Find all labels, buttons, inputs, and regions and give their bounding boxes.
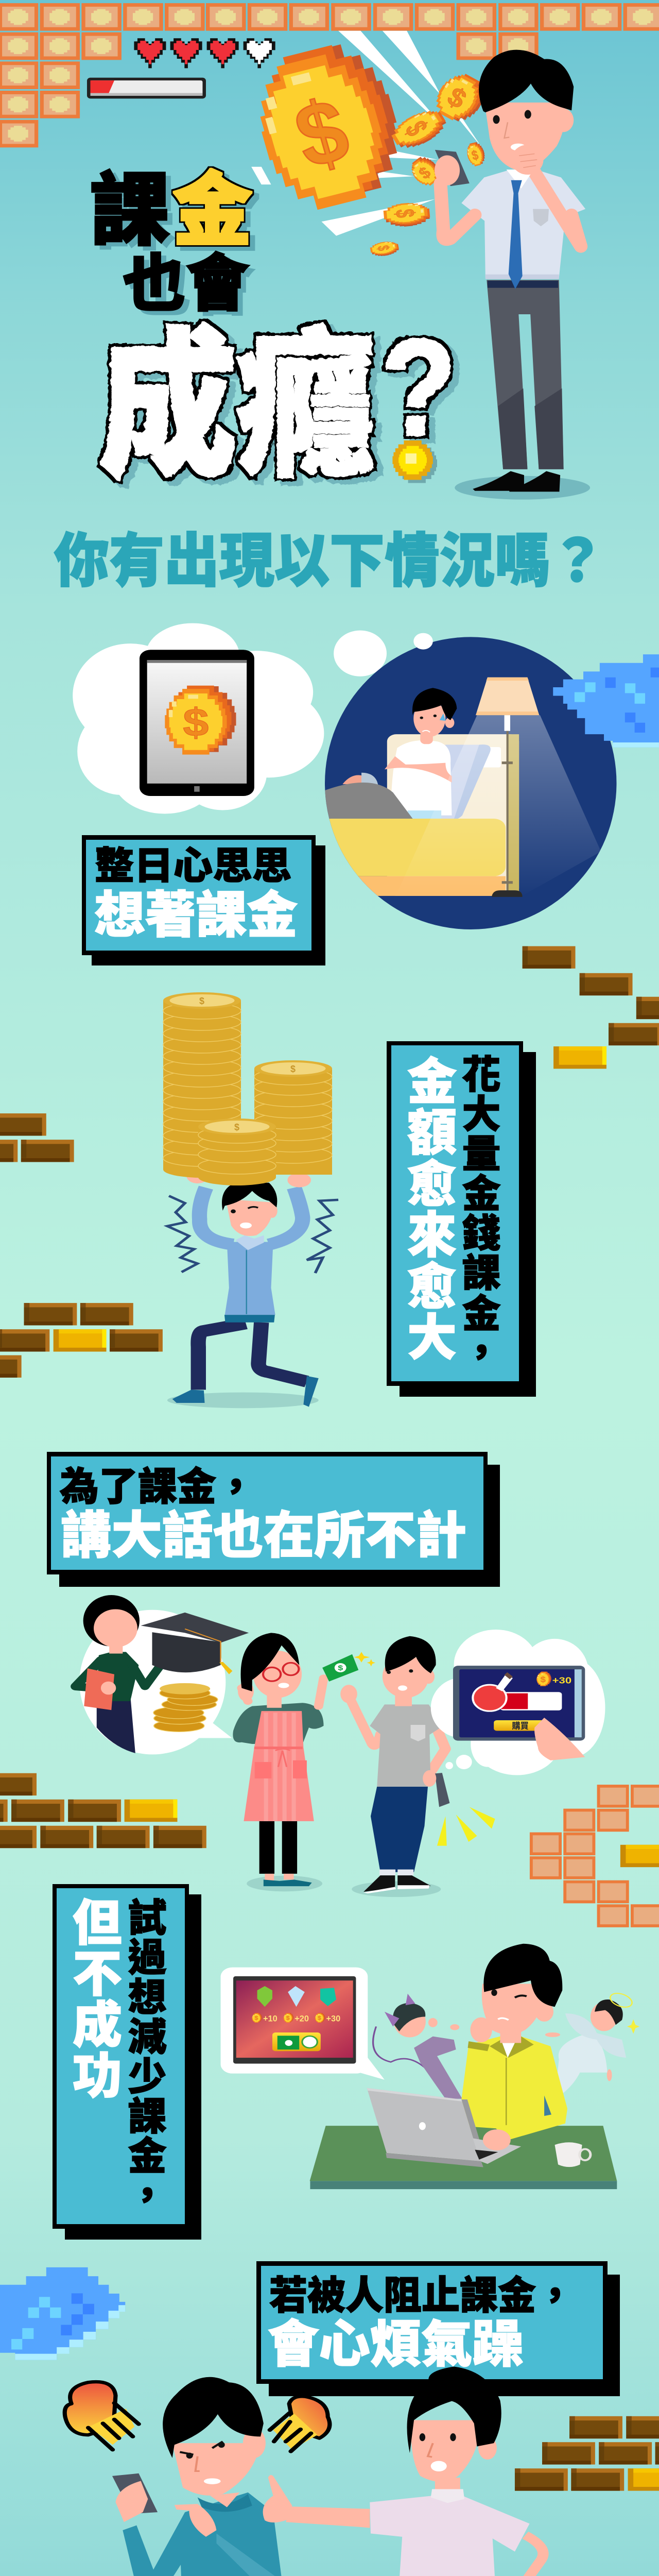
speech bubble: teacher and coins: [76, 1595, 249, 1754]
woman with apron: [233, 1633, 375, 1891]
small flying coins: [369, 67, 491, 258]
speech bubble: game purchase screen: +20: [294, 2014, 309, 2024]
title: 成癮?: ?: [380, 311, 455, 463]
callout 5: 若被人阻止課金 會心煩氣躁: [256, 2261, 620, 2396]
callout 3: 為了課金 講大話也在所不計: [47, 1452, 500, 1587]
orange blocks right middle: [530, 1785, 659, 1927]
white burst rays: [251, 31, 481, 236]
callout 2: vertical text 花大量金錢課金: 金額愈來愈大: [407, 1055, 457, 1366]
title: 成癮?: 成癮: [98, 316, 375, 495]
worried man at laptop on green table: [310, 1944, 617, 2189]
panel 1: night bed scene: [319, 633, 617, 929]
man lifting coin stacks: [167, 1169, 338, 1408]
coin stack tall: $: [199, 996, 204, 1006]
man with phone: [435, 50, 590, 500]
thought cloud: health potion game: +30: [552, 1675, 571, 1686]
small glowing pixel coin: [392, 440, 437, 483]
blue pixel cloud left: [0, 2267, 125, 2360]
callout 5: 若被人阻止課金 會心煩氣躁: 會心煩氣躁: [268, 2316, 524, 2372]
callout 1: 整日心思思 想著課金: 想著課金: [94, 887, 298, 943]
thought cloud: health potion game: 購買: [512, 1721, 529, 1731]
bricks left middle: [0, 1773, 206, 1848]
top orange pixel blocks: [0, 3, 659, 147]
thought cloud: health potion game: [431, 1630, 605, 1775]
man with phone and T-shirt: [340, 1636, 495, 1897]
callout 2: vertical text 花大量金錢課金: 花大量金錢課金，: [462, 1053, 501, 1374]
title: 課金: 課: [90, 166, 170, 255]
coin stack front: [198, 1118, 276, 1185]
callout 3: 為了課金 講大話也在所不計: 為了課金，: [60, 1465, 255, 1509]
callout 2: vertical text 花大量金錢課金: [387, 1041, 536, 1397]
coin stack right: [254, 1060, 332, 1175]
coin stack tall: [163, 992, 241, 1178]
brick steps right upper: [523, 946, 659, 1069]
angry man with hoodie and phone: [112, 2377, 283, 2576]
coin stack right: $: [290, 1064, 296, 1074]
callout 4: vertical text 試過想減少課金: 但不成功: [73, 1896, 122, 2104]
gold brick right: [620, 1845, 659, 1867]
woman with apron: $: [338, 1664, 343, 1672]
speech bubble: game purchase screen: +30: [326, 2014, 340, 2024]
coin stack front: $: [234, 1122, 239, 1132]
panel 1: thought cloud with tablet: [73, 623, 387, 814]
callout 4: vertical text 試過想減少課金: 試過想減少課金，: [128, 1896, 167, 2217]
angel on shoulder: [545, 1991, 639, 2099]
hearts and health bar: [87, 38, 275, 98]
callout 4: vertical text 試過想減少課金: [53, 1884, 201, 2240]
callout 5: 若被人阻止課金 會心煩氣躁: 若被人阻止課金，: [269, 2274, 574, 2318]
callout 3: 為了課金 講大話也在所不計: 講大話也在所不計: [61, 1507, 466, 1564]
speech bubble: game purchase screen: [221, 1968, 385, 2080]
blue pixel cloud right: [553, 654, 659, 748]
question heading: 你有出現以下情況嗎？: [54, 529, 605, 594]
devil on shoulder: [373, 1994, 462, 2099]
speech bubble: game purchase screen: +10: [263, 2014, 278, 2024]
bricks right lower: [515, 2416, 659, 2491]
title: 課金: 金: [172, 166, 252, 255]
angry fire puffs: [65, 2382, 330, 2451]
bricks left upper: [0, 1113, 163, 1378]
callout 1: 整日心思思 想著課金: 整日心思思: [95, 844, 291, 887]
callout 1: 整日心思思 想著課金: [82, 835, 325, 965]
big pixel coin: [243, 35, 414, 218]
title: 也會: 也會: [123, 249, 249, 318]
arguing man pointing: [263, 2367, 543, 2576]
title: 課金: [90, 166, 252, 255]
